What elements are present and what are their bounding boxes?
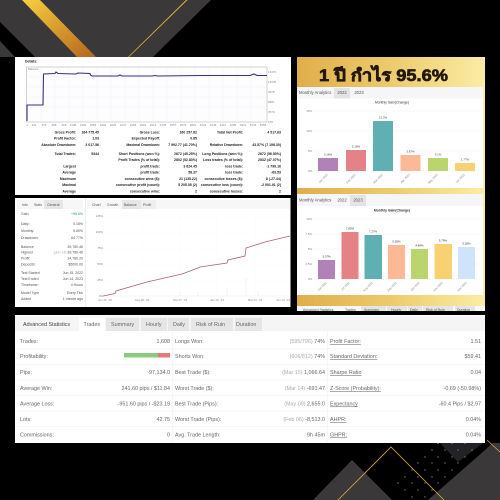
decoration: top-left gold and grey shapes [0,0,211,57]
report statistics table: Maximum [60,177,76,181]
report statistics table: Gross Profit: [55,130,76,134]
report statistics table: 4 517.63 [267,130,281,134]
monthly chart: second half [297,194,483,295]
growth line chart: 75% [97,246,103,250]
column 3 statistics: Standard Deviation: [330,354,377,360]
ghost tabs strip [297,306,485,311]
column 2 statistics: Best Trade ($): [175,370,211,376]
info sidebar: 1 minute ago [63,297,83,301]
report statistics table: 5 205.08 (2) [178,183,197,187]
column 1 statistics: Average Loss: [20,402,54,408]
info sidebar [17,200,83,301]
info sidebar: Test Ended [21,277,39,281]
growth line chart: 25% [97,278,103,282]
report statistics table: 8 (-27.44) [266,177,281,181]
statistics tabs: Daily [173,322,185,328]
info sidebar: Test Started [21,271,40,275]
heading: details: Details: [25,60,37,64]
balance line chart: 1804 [100,123,107,127]
report statistics table: Total Net Profit: [217,130,243,134]
balance line chart: 2469 [130,123,137,127]
monthly chart: first half: 10% [306,129,312,133]
balance line chart: 6581 [268,100,275,104]
balance line chart: 9578 [268,90,275,94]
column 2 statistics: Worst Trade (Pips): [175,417,221,423]
profitability bar [124,353,170,358]
column 2 statistics: (Mar 14) -691.47 [285,386,325,392]
column 3 statistics: -0.69 (-50.98%) [444,386,481,392]
monthly chart: second half: Aug 2022 [362,281,374,292]
report statistics table: Short Positions (won %): [119,152,160,156]
balance line chart: 16476 [268,70,276,74]
info sidebar: 64.77% [71,236,83,240]
column 2 statistics: Shorts Won: [175,354,205,360]
monthly chart: first half: Apr 2023 [400,173,411,184]
column 1 statistics: Commissions: [20,432,54,438]
balance line chart: 1582 [90,123,97,127]
growth line chart: Balance [124,203,137,207]
info sidebar: 0.18% [73,222,83,226]
report statistics table: Profit Trades (% of total): [118,158,160,162]
report statistics table: Total Trades: [54,152,76,156]
ghost tabs strip: Risk of Ruin [426,308,445,312]
info sidebar: $5000.00 [68,262,83,266]
info sidebar: Drawdown: [21,236,39,240]
info sidebar: Jun 15, 2022 [63,271,83,275]
monthly chart: second half: 7.27% [369,230,378,234]
report statistics table: consecutive wins ($): [125,177,160,181]
growth line chart: Jun 14, '23 [276,298,290,302]
column 1 statistics: Pips: [20,370,32,376]
monthly chart: second half: 0% [308,277,312,281]
report statistics table: 3 017.56 [85,143,99,147]
column 1 statistics: Lots: [20,417,32,423]
report statistics table: Largest [63,164,77,168]
balance line chart: 3357 [170,123,177,127]
monthly chart: first half: 3.18% [324,152,333,156]
panel: growth backtest [15,198,290,307]
column 1 statistics [20,339,170,438]
report statistics table: 2 [195,190,197,194]
monthly chart: first half: 5.18% [352,144,361,148]
report statistics table: Expected Payoff: [132,136,160,140]
monthly chart: second half: Monthly Analytics [299,198,331,202]
monthly chart: first half: 3.1% [435,152,442,156]
balance line chart: 3579 [268,110,275,114]
monthly chart: first half: 2022 [337,90,347,95]
report statistics table: 43.57% (7 198.30) [252,143,281,147]
report statistics table: Average [62,190,76,194]
balance line chart: 2913 [150,123,157,127]
monthly chart: second half: Jul 2022 [340,281,351,291]
balance line chart: 1 [26,123,28,127]
balance line chart: 231 [32,123,37,127]
column 2 statistics: Worst Trade ($): [175,386,214,392]
info sidebar: Model Type [21,291,39,295]
column 2 statistics: Longs Won: [175,339,204,345]
column 1 statistics: 241.60 pips / $11.84 [122,386,170,392]
info sidebar: Highest [21,250,33,254]
column 1 statistics: Average Win: [20,386,52,392]
report statistics table: Maximal [62,183,76,187]
growth line chart: Aug 28, '22 [135,298,150,302]
balance line chart: 4911 [240,123,246,127]
info sidebar: +95.6% [71,212,83,216]
column 3 statistics: Z-Score (Probability): [330,386,381,392]
balance line chart: 918 [62,123,67,127]
balance line chart: 1138 [70,123,76,127]
growth line chart: 0% [99,294,103,298]
info sidebar: 39,780.46 [67,245,83,249]
report statistics table: Absolute Drawdown: [41,143,76,147]
info sidebar: Stats [34,203,42,207]
info sidebar: Daily: [21,222,30,226]
monthly chart: second half: 4.84% [415,244,424,248]
column 2 statistics: Avg. Trade Length: [175,432,220,438]
column 1 statistics: Trades: [20,339,38,345]
column 1 statistics: 0 [167,432,170,438]
column 3 statistics: $59.41 [464,354,481,360]
column 1 statistics: 1,608 [156,339,170,345]
info sidebar: Timeframe: [21,283,39,287]
report statistics table: Long Positions (won %): [202,152,243,156]
info sidebar: General [47,203,60,207]
growth line chart: Profit [143,203,151,207]
monthly chart: first half: 12.3% [379,116,388,120]
growth line chart: Jun 15, '22 [98,298,112,302]
info sidebar: Info [22,203,28,207]
monthly chart: second half: Dec 2022 [456,281,468,292]
report statistics table: 160 257.82 [179,130,197,134]
report statistics table: consecutive losses: [210,190,243,194]
balance line chart: 3135 [160,123,167,127]
statistics tabs: Duration [236,322,256,328]
report statistics table: Gross Loss: [140,130,160,134]
monthly chart: second half: Jun 2022 [316,281,328,292]
monthly chart: first half: May 2023 [427,173,439,185]
monthly chart: second half: Nov 2022 [432,281,444,292]
info sidebar: Profit: [21,256,30,260]
balance line chart: 12978 [268,80,276,84]
monthly chart: second half: 5.28% [462,242,471,246]
column 3 statistics: AHPR: [330,417,346,423]
growth line chart: Growth [107,203,118,207]
monthly chart: second half: 2022 [337,198,347,202]
column 2 statistics: 9h 45m [307,432,326,438]
report statistics table: profit trade: [140,164,160,168]
decoration: bottom-right triangles and dots [313,440,500,500]
report statistics table: 2802 (52.83%) [174,158,197,162]
column 2 statistics: (Feb 06) -8,513.0 [283,417,325,423]
column 1 statistics: -97,134.0 [147,370,170,376]
column 1 statistics: Profitability: [20,354,48,360]
monthly chart: second half: Sep 2022 [386,281,398,292]
monthly chart: second half: 5% [308,247,312,251]
panel: backtest report [15,57,291,195]
ghost tabs strip: Summary [364,308,379,312]
growth line chart: Nov 07, '22 [173,298,188,302]
info sidebar: 4 Hours [71,283,83,287]
info sidebar: 34,780.20 [67,256,83,260]
monthly chart: first half: 3.87% [406,150,415,154]
balance line chart: 4245 [210,123,217,127]
report statistics table: Loss trades (% of total): [203,158,243,162]
info sidebar: Balance [21,245,34,249]
growth line chart: Chart [92,203,101,207]
column 3 statistics: 0.04% [466,432,481,438]
panel: gold profit banner with monthly charts [297,57,485,312]
report statistics table: Relative Drawdown: [210,143,243,147]
monthly chart: first half: 15% [306,109,312,113]
monthly chart: second half: 3.07% [322,254,331,258]
monthly chart: first half: Jun 2023 [454,173,466,184]
monthly chart: first half: Mar 2023 [372,173,384,184]
column 3 statistics: 1.51 [470,339,481,345]
monthly chart: first half: 2023 [354,90,364,95]
statistics tabs: Advanced Statistics [23,322,70,328]
column 2 statistics [175,339,326,438]
column 3 statistics: 0.04% [466,417,481,423]
monthly chart: second half: 7.85% [346,226,355,230]
column 3 statistics: 0.04 [470,370,481,376]
monthly chart: second half: Oct 2022 [410,281,421,292]
column 1 statistics: 42.75 [156,417,170,423]
title: one year profit: 1 ปี กำไร 95.6% [319,65,448,85]
statistics tabs: Trades [84,322,100,328]
report statistics table: 2 [279,190,281,194]
monthly chart: second half: 10% [306,217,312,221]
report statistics table: profit trade: [140,170,160,174]
ghost tabs strip: Hourly [391,308,401,312]
column 3 statistics: Sharpe Ratio [330,370,361,376]
balance line chart: 5133 [250,123,257,127]
balance line chart: 2691 [140,123,147,127]
report statistics table: Profit Factor: [54,136,76,140]
panel: advanced statistics [15,315,485,443]
column 2 statistics: (606/812) 74% [290,354,325,360]
balance line chart: 3801 [190,123,197,127]
report statistics table: Average [62,170,76,174]
column 3 statistics: GHPR: [330,432,347,438]
monthly chart: first half: 1.77% [461,158,470,162]
monthly chart: second half: Monthly Gain(Change) [374,208,410,212]
column 2 statistics: Best Trade (Pips): [175,402,218,408]
report statistics table: 1.03 [92,136,99,140]
info sidebar: Every Tick [67,291,83,295]
balance line chart: 1360 [80,123,87,127]
report statistics table: consecutive losses ($): [204,177,243,181]
growth line chart: Mar 01, '23 [248,298,263,302]
ghost tabs strip: Trades [345,308,356,312]
monthly chart: second half: 7.5% [305,232,312,236]
balance line chart [26,67,276,127]
report statistics table: -1 799.16 [266,164,281,168]
info sidebar: (Jun 14) 39,780.46 [54,250,83,254]
column 2 statistics: (Mar 15) 1,066.64 [282,370,325,376]
column 2 statistics: (May 09) 2,655.0 [284,402,325,408]
balance line chart: Balance [28,67,39,71]
monthly chart: second half: 5.79% [439,238,448,242]
statistics tabs: Risk of Ruin [196,322,225,328]
report statistics table: 2672 (56.50%) [258,152,281,156]
column 3 statistics: Profit Factor: [330,339,361,345]
monthly chart: first half: Monthly Analytics [299,90,331,95]
balance line chart: 470 [42,123,47,127]
report statistics table: 5344 [91,152,99,156]
ghost tabs strip: Daily [410,308,418,312]
growth line chart [87,200,290,302]
report statistics table: consecutive loss (count): [201,183,243,187]
info sidebar: Monthly: [21,229,34,233]
column 1 statistics: -951.60 pips / -$23.19 [118,402,170,408]
statistics tabs [23,317,262,331]
report statistics table: -2 001.91 (2) [261,183,281,187]
report statistics table: 164 775.45 [81,130,99,134]
info sidebar: Added [21,297,31,301]
statistics tabs: Summary [111,322,134,328]
monthly chart: first half: Monthly Gain(Change) [375,100,409,104]
balance line chart: 4467 [220,123,227,127]
monthly chart: second half: 5.55% [392,240,401,244]
info sidebar: 5.69% [73,229,83,233]
monthly chart: first half: 0% [308,169,312,173]
monthly chart: second half: 2.5% [305,262,312,266]
report statistics table: 2532 (47.07%) [258,158,281,162]
report statistics table: loss trade: [225,164,243,168]
balance line chart: 2247 [120,123,127,127]
column 2 statistics: (595/796) 74% [290,339,325,345]
balance line chart: 698 [52,123,57,127]
monthly chart: first half [297,87,483,188]
column 3 statistics: -60.4 Pips / $2.97 [439,402,481,408]
info sidebar: Jun 14, 2023 [63,277,83,281]
growth line chart: 125% [96,214,103,218]
report statistics table: consecutive profit (count): [116,183,160,187]
info sidebar: Gain: [21,212,29,216]
monthly chart: first half: 5% [308,149,312,153]
balance line chart: 3579 [180,123,187,127]
report statistics table: Maximal Drawdown: [126,143,160,147]
report statistics table: 21 (135.22) [179,177,197,181]
balance line chart: 578 [268,120,273,124]
balance line chart: 2026 [110,123,117,127]
growth line chart: 100% [96,230,103,234]
growth line chart: Jan 16, '23 [210,298,224,302]
balance line chart: 4689 [230,123,237,127]
report statistics table: 3 624.45 [183,164,197,168]
monthly chart: first half: Jan 2023 [317,173,329,184]
report statistics table: consecutive wins: [130,190,160,194]
monthly chart: second half: 2023 [353,198,363,202]
report statistics table: 58.37 [188,170,197,174]
balance line chart: 5355 [260,123,267,127]
report statistics table: 2672 (45.25%) [174,152,197,156]
ghost tabs strip: Advanced Statistics [303,308,334,312]
growth line chart: 50% [97,262,103,266]
column 3 statistics [330,339,481,438]
column 3 statistics: Expectancy [330,402,358,408]
report statistics table: 0.85 [190,136,197,140]
statistics tabs: Hourly [146,322,162,328]
info sidebar: Deposits: [21,262,36,266]
report statistics table [41,130,281,194]
report statistics table: loss trade: [225,170,243,174]
balance line chart: 4023 [200,123,207,127]
ghost tabs strip: Duration [457,308,470,312]
monthly chart: first half: Feb 2023 [345,173,357,184]
report statistics table: -63.53 [271,170,281,174]
report statistics table: 7 992.77 (41.70%) [168,143,197,147]
